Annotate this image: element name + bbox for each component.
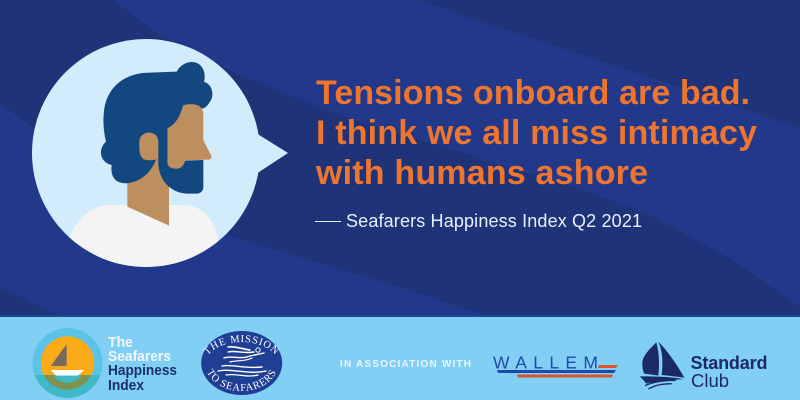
- attribution: Seafarers Happiness Index Q2 2021: [346, 211, 642, 231]
- logo wordmark: [108, 334, 177, 394]
- ear: [139, 133, 158, 162]
- face: [168, 104, 212, 169]
- logo: Standard Club: Club: [691, 370, 729, 391]
- in association with label: IN ASSOCIATION WITH: [340, 359, 471, 370]
- logo wordmark: Seafarers: [108, 348, 171, 365]
- quote headline: [315, 74, 757, 192]
- quote headline: with humans ashore: [315, 154, 648, 192]
- logo: Wallem: WALLEM: [493, 352, 598, 372]
- curved lettering: [203, 335, 280, 392]
- wordmark: Standard: [690, 353, 768, 373]
- shirt: [68, 205, 218, 270]
- bubble circle: [32, 39, 260, 267]
- logo: The Mission to Seafarers: [201, 331, 282, 395]
- curved lettering: TO SEAFARERS: [208, 368, 276, 392]
- neck: [127, 157, 169, 226]
- logo: Seafarers Happiness Index: [32, 328, 177, 398]
- logo wordmark: Index: [108, 377, 145, 394]
- quote headline: I think we all miss intimacy: [316, 114, 757, 152]
- bubble tail: [256, 133, 288, 174]
- footer band: [0, 315, 800, 400]
- icon: sun and boat: [32, 328, 102, 398]
- logo: Wallem: [493, 352, 618, 378]
- logo: Standard Club: [640, 342, 768, 391]
- man portrait: [68, 62, 218, 270]
- quote headline: Tensions onboard are bad.: [316, 74, 750, 112]
- portrait speech bubble: [32, 39, 288, 270]
- logo wordmark: Happiness: [108, 362, 177, 379]
- hair and beard: [101, 62, 212, 194]
- curved lettering: THE MISSION: [203, 335, 280, 354]
- logo wordmark: The: [108, 334, 133, 351]
- icon: sailing ship: [640, 342, 684, 389]
- angel and waves: [218, 347, 266, 376]
